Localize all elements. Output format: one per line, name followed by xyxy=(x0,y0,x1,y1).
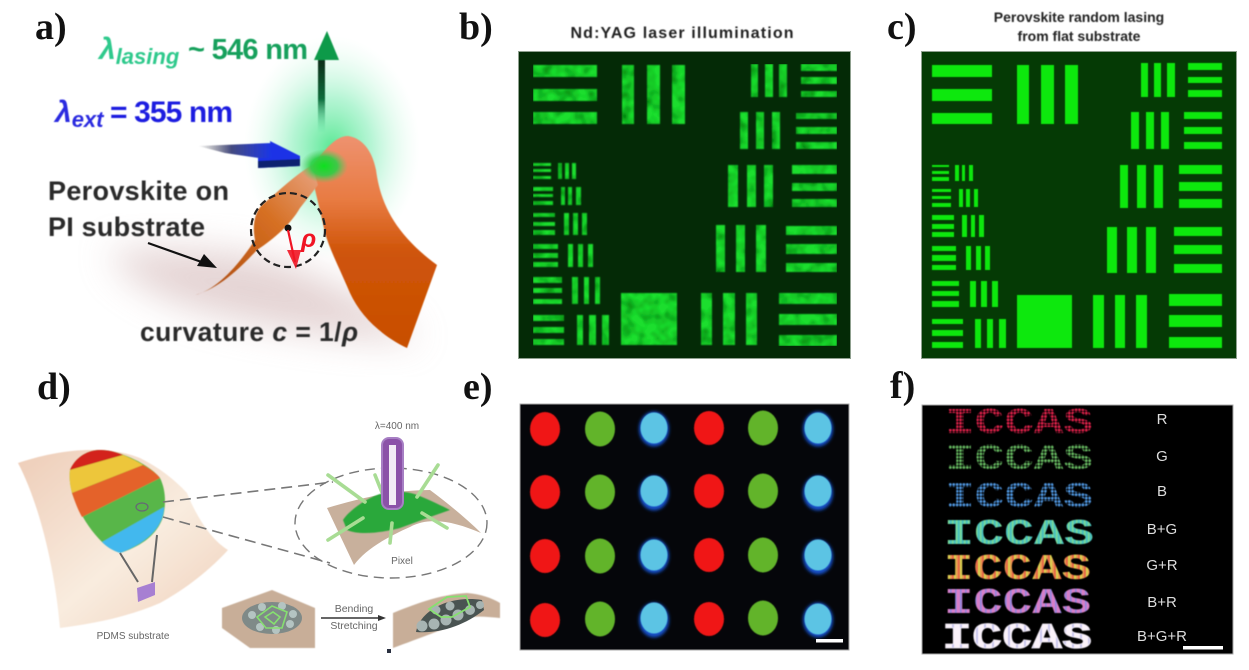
channel labels: G+R xyxy=(1146,557,1178,574)
curved substrate main sheet xyxy=(310,136,437,348)
lasing wavelength label: lasing xyxy=(116,44,180,69)
small marker xyxy=(387,649,391,653)
perovskite label: Perovskite on xyxy=(48,176,229,206)
green dots xyxy=(585,410,778,636)
pixel label: Pixel xyxy=(391,556,413,567)
green pixel xyxy=(343,492,450,533)
scale bar f xyxy=(1183,646,1223,650)
flat pixel xyxy=(222,590,315,648)
test chart b xyxy=(533,64,837,346)
heading c label: c) xyxy=(887,6,917,48)
excitation pillar xyxy=(382,438,403,509)
bending label: Bending xyxy=(335,603,373,615)
perovskite label: PI substrate xyxy=(48,212,205,242)
excitation value: = 355 nm xyxy=(110,96,233,129)
ICCAS red: ICCAS xyxy=(945,403,1093,444)
lasing value: ~ 546 nm xyxy=(188,34,308,66)
display background xyxy=(922,405,1233,654)
channel labels: R xyxy=(1157,411,1168,428)
panel b: Nd:YAG illumination xyxy=(459,6,850,358)
channel labels: B+G xyxy=(1147,521,1177,538)
balloon ropes xyxy=(120,535,157,582)
label f: f) xyxy=(890,365,915,407)
scale bar e xyxy=(816,639,843,642)
excitation wavelength label: ext xyxy=(72,107,105,132)
panel d: balloon on PDMS xyxy=(18,366,500,653)
array background xyxy=(520,404,849,650)
bent pixel xyxy=(393,593,500,648)
red dots xyxy=(530,411,724,637)
channel labels: G xyxy=(1156,448,1168,465)
wavelength label: λ=400 nm xyxy=(375,421,419,432)
target background c xyxy=(922,52,1236,358)
panel a: curved perovskite laser xyxy=(35,6,437,348)
blue halos xyxy=(639,412,833,638)
substrate shadow xyxy=(110,250,420,340)
PDMS sheet xyxy=(18,450,228,628)
excitation wavelength label: λ xyxy=(55,96,72,129)
pixel substrate xyxy=(327,490,481,565)
panel f: ICCAS display xyxy=(890,365,1233,659)
heading b label: b) xyxy=(459,6,493,48)
heading c title: Perovskite random lasing xyxy=(994,9,1164,25)
balloon envelope xyxy=(70,450,165,553)
balloon basket xyxy=(137,582,155,602)
ICCAS rows xyxy=(942,403,1094,659)
label a: a) xyxy=(35,6,67,48)
panel e: RGB pixel array xyxy=(463,366,849,650)
curvature formula: curvature c = 1/ρ xyxy=(140,317,358,347)
target background b xyxy=(518,52,850,358)
stretching label: Stretching xyxy=(330,620,378,632)
zoom ellipse xyxy=(295,468,487,578)
channel labels: B xyxy=(1157,483,1167,500)
panel c: flat substrate lasing xyxy=(887,6,1236,358)
excitation arrow xyxy=(198,141,300,168)
green glow xyxy=(244,36,420,260)
ICCAS green: ICCAS xyxy=(945,439,1093,480)
label d: d) xyxy=(37,366,71,408)
rho label: ρ xyxy=(300,225,316,253)
lasing wavelength label: λ xyxy=(99,33,116,66)
zoom marker xyxy=(136,503,148,511)
channel labels: B+R xyxy=(1147,594,1177,611)
pillar highlight xyxy=(389,445,396,505)
channel labels: B+G+R xyxy=(1137,628,1187,645)
ICCAS white: ICCAS xyxy=(942,618,1092,659)
curvature circle xyxy=(251,193,325,267)
lasing arrow xyxy=(314,31,339,132)
radius arrow xyxy=(284,224,301,269)
cyan dots xyxy=(640,412,832,634)
zoom lines xyxy=(163,482,333,563)
emission rods xyxy=(328,465,447,543)
heading b title: Nd:YAG laser illumination xyxy=(570,25,794,42)
test chart c xyxy=(932,63,1222,348)
pointer arrow xyxy=(148,243,217,268)
ICCAS blue green: ICCAS xyxy=(944,514,1094,555)
ICCAS green red: ICCAS xyxy=(944,549,1091,590)
channel labels xyxy=(1137,411,1187,645)
curved substrate left wing xyxy=(195,165,318,295)
PDMS label: PDMS substrate xyxy=(97,631,170,642)
heading c title: from flat substrate xyxy=(1018,28,1141,44)
ICCAS blue red: ICCAS xyxy=(944,583,1091,624)
bending arrow xyxy=(321,615,386,621)
ICCAS blue: ICCAS xyxy=(945,477,1093,518)
green emission spot xyxy=(300,149,348,183)
label e: e) xyxy=(463,366,493,408)
